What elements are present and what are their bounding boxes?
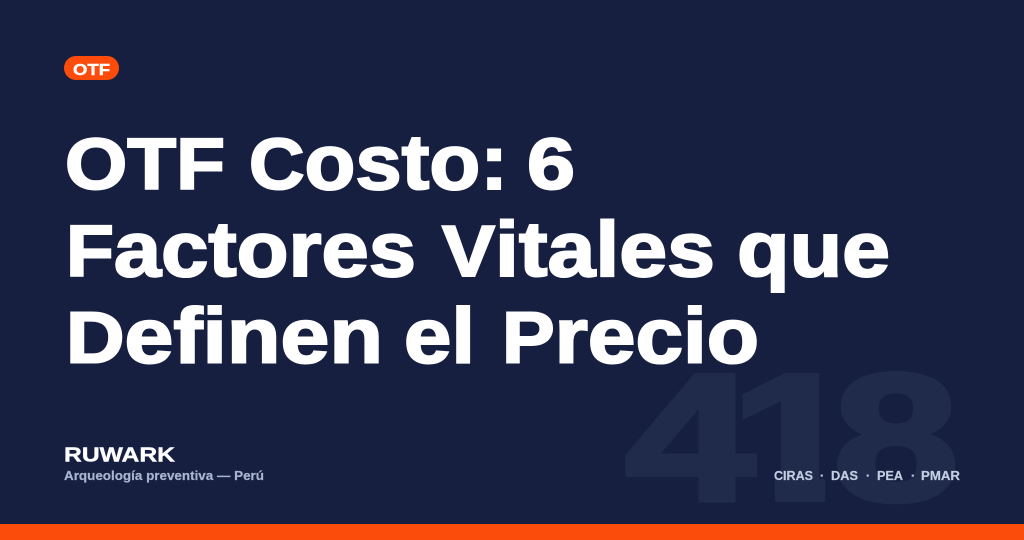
title: Vitales (442, 205, 715, 293)
certification list: PMAR (921, 469, 960, 483)
title: 6 (527, 125, 575, 205)
title: Precio (502, 292, 759, 380)
bottom accent bar (0, 524, 1024, 540)
watermark number: 1 (730, 337, 859, 539)
title: Costo: (249, 118, 508, 206)
certification list: PEA (877, 469, 903, 483)
watermark number: 4 (625, 337, 755, 539)
badge: OTF (64, 56, 119, 80)
brand name: RUWARK (64, 444, 175, 466)
badge: OTF: OTF (73, 62, 110, 79)
certification list: · (911, 469, 915, 483)
certification list: · (866, 469, 870, 483)
watermark number (626, 371, 955, 504)
certification list (774, 469, 960, 483)
title: Definen (66, 292, 383, 380)
title: OTF (65, 125, 225, 205)
brand tagline: Arqueología preventiva — Perú (64, 469, 264, 483)
certification list: · (820, 469, 824, 483)
title: que (737, 205, 890, 293)
title (65, 118, 890, 380)
title: Factores (66, 205, 416, 293)
watermark number: 8 (833, 337, 959, 539)
title: el (404, 292, 475, 380)
certification list: CIRAS (774, 469, 813, 483)
certification list: DAS (831, 469, 858, 483)
